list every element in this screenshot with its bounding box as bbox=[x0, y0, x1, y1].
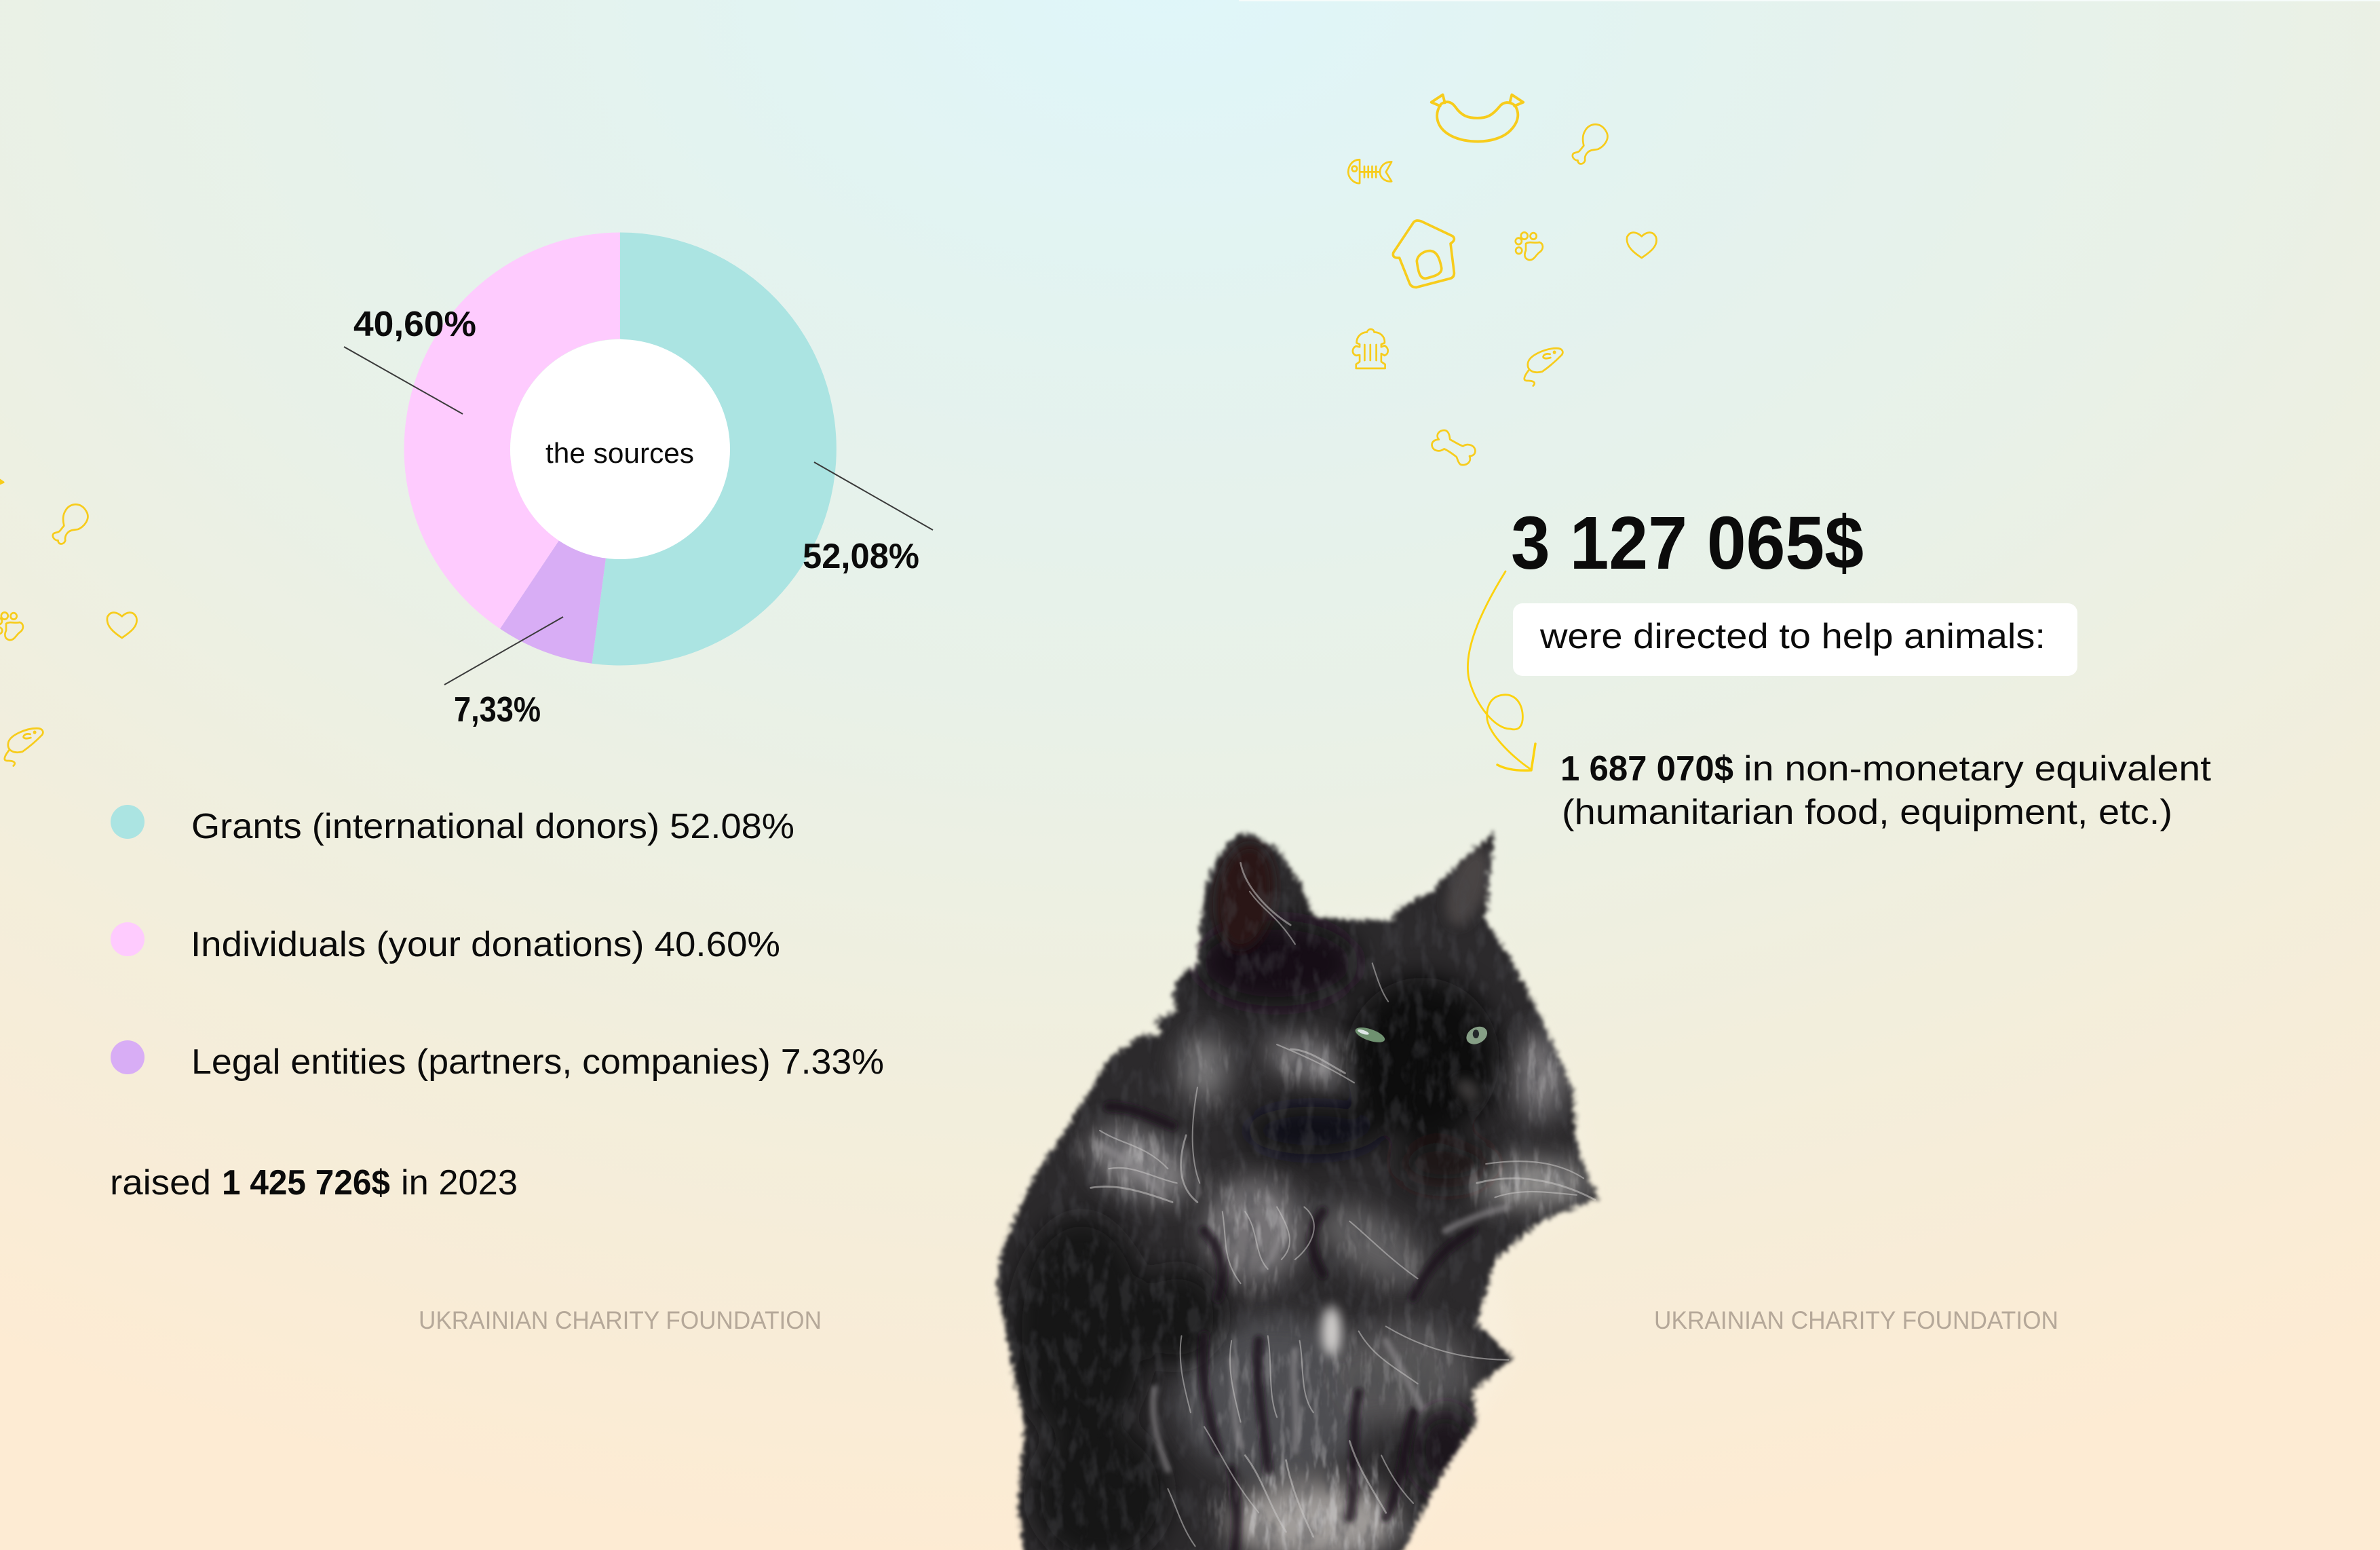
cat body base bbox=[993, 829, 1602, 1550]
icon: paw bbox=[1516, 232, 1543, 260]
legend dot: individuals bbox=[111, 922, 145, 956]
total amount heading: 3 127 065$ bbox=[1511, 502, 1864, 585]
arrow: hand-drawn loop bbox=[1467, 571, 1535, 770]
raised total: raised bbox=[110, 1163, 211, 1203]
legend text: individuals: Individuals (your donations) 40.60% bbox=[191, 925, 780, 964]
leader line: 7,33% bbox=[444, 617, 563, 685]
icon: fish bone bbox=[1348, 159, 1391, 183]
icon: mouse toy bbox=[5, 728, 43, 766]
cat eyes bbox=[1354, 1023, 1490, 1048]
chart segment: legal entities 7.33% bbox=[500, 540, 606, 664]
text: non-monetary amount: in non-monetary equivalent bbox=[1744, 749, 2212, 789]
icon: dog house bbox=[1393, 221, 1454, 287]
legend dot: legal entities bbox=[111, 1040, 145, 1074]
text: non-monetary amount: 1 687 070$ bbox=[1560, 749, 1733, 789]
panel: aid total bbox=[1467, 502, 2212, 1334]
cat body bbox=[993, 829, 1602, 1550]
footer: right: UKRAINIAN CHARITY FOUNDATION bbox=[1654, 1306, 2058, 1334]
leader line: 52,08% bbox=[814, 462, 933, 530]
icon: drumstick bbox=[53, 504, 88, 544]
legend text: grants: Grants (international donors) 52.08% bbox=[191, 807, 794, 846]
icon: heart bbox=[1627, 233, 1657, 258]
icon: hydrant bbox=[1353, 329, 1388, 368]
icons: pet supplies cluster bbox=[1348, 95, 1657, 465]
icon: paw bbox=[0, 612, 23, 640]
icon: mouse toy bbox=[1524, 348, 1562, 386]
value label: 52,08%: 52,08% bbox=[803, 537, 919, 576]
cat fur wisps bbox=[1091, 863, 1595, 1546]
cat fur clumps bbox=[1100, 1107, 1509, 1550]
icon: drumstick bbox=[1573, 124, 1607, 164]
value label: 40,60%: 40,60% bbox=[353, 305, 476, 344]
cat soft halo bbox=[997, 832, 1597, 1550]
icon: sausage tie tip bbox=[0, 475, 3, 486]
chart segment: grants 52.08% bbox=[592, 232, 837, 665]
leader line: 40,60% bbox=[344, 347, 463, 414]
legend text: legal entities: Legal entities (partners, companies) 7.33% bbox=[191, 1042, 884, 1082]
donut centre bbox=[510, 339, 730, 559]
panel: funding sources bbox=[110, 232, 933, 1334]
top edge highlight bbox=[1239, 0, 2380, 1]
cat shading: mid tones bbox=[1079, 1031, 1590, 1550]
cat shading: dark tones bbox=[1014, 920, 1499, 1550]
donut chart bbox=[404, 232, 837, 665]
chart segment: individuals 40.60% bbox=[404, 232, 620, 628]
legend bbox=[111, 805, 884, 1082]
text: non-monetary amount bbox=[1560, 749, 2212, 832]
cat white chest spot bbox=[1322, 1306, 1341, 1356]
callout: directed to help animals bbox=[1513, 603, 2077, 676]
raised total: in 2023 bbox=[401, 1163, 518, 1203]
icon: heart bbox=[107, 613, 137, 638]
icon: sausage bbox=[1432, 95, 1523, 141]
cat ears bbox=[1210, 840, 1498, 953]
icons: left partial group bbox=[0, 475, 137, 766]
legend dot: grants bbox=[111, 805, 145, 839]
icon: bone bbox=[1432, 430, 1475, 465]
callout: directed to help animals: were directed to help animals: bbox=[1539, 617, 2046, 656]
raised total: 1 425 726$ bbox=[222, 1163, 390, 1203]
text: non-monetary amount: (humanitarian food, equipment, etc.) bbox=[1562, 793, 2172, 832]
value label: 7,33%: 7,33% bbox=[454, 690, 541, 730]
cat fur texture bbox=[999, 842, 1577, 1550]
centre label: the sources bbox=[545, 437, 694, 469]
footer: left: UKRAINIAN CHARITY FOUNDATION bbox=[419, 1306, 822, 1334]
photo: black fluffy cat bbox=[993, 829, 1602, 1550]
cat nose bbox=[1454, 1079, 1479, 1103]
raised total bbox=[110, 1163, 518, 1203]
